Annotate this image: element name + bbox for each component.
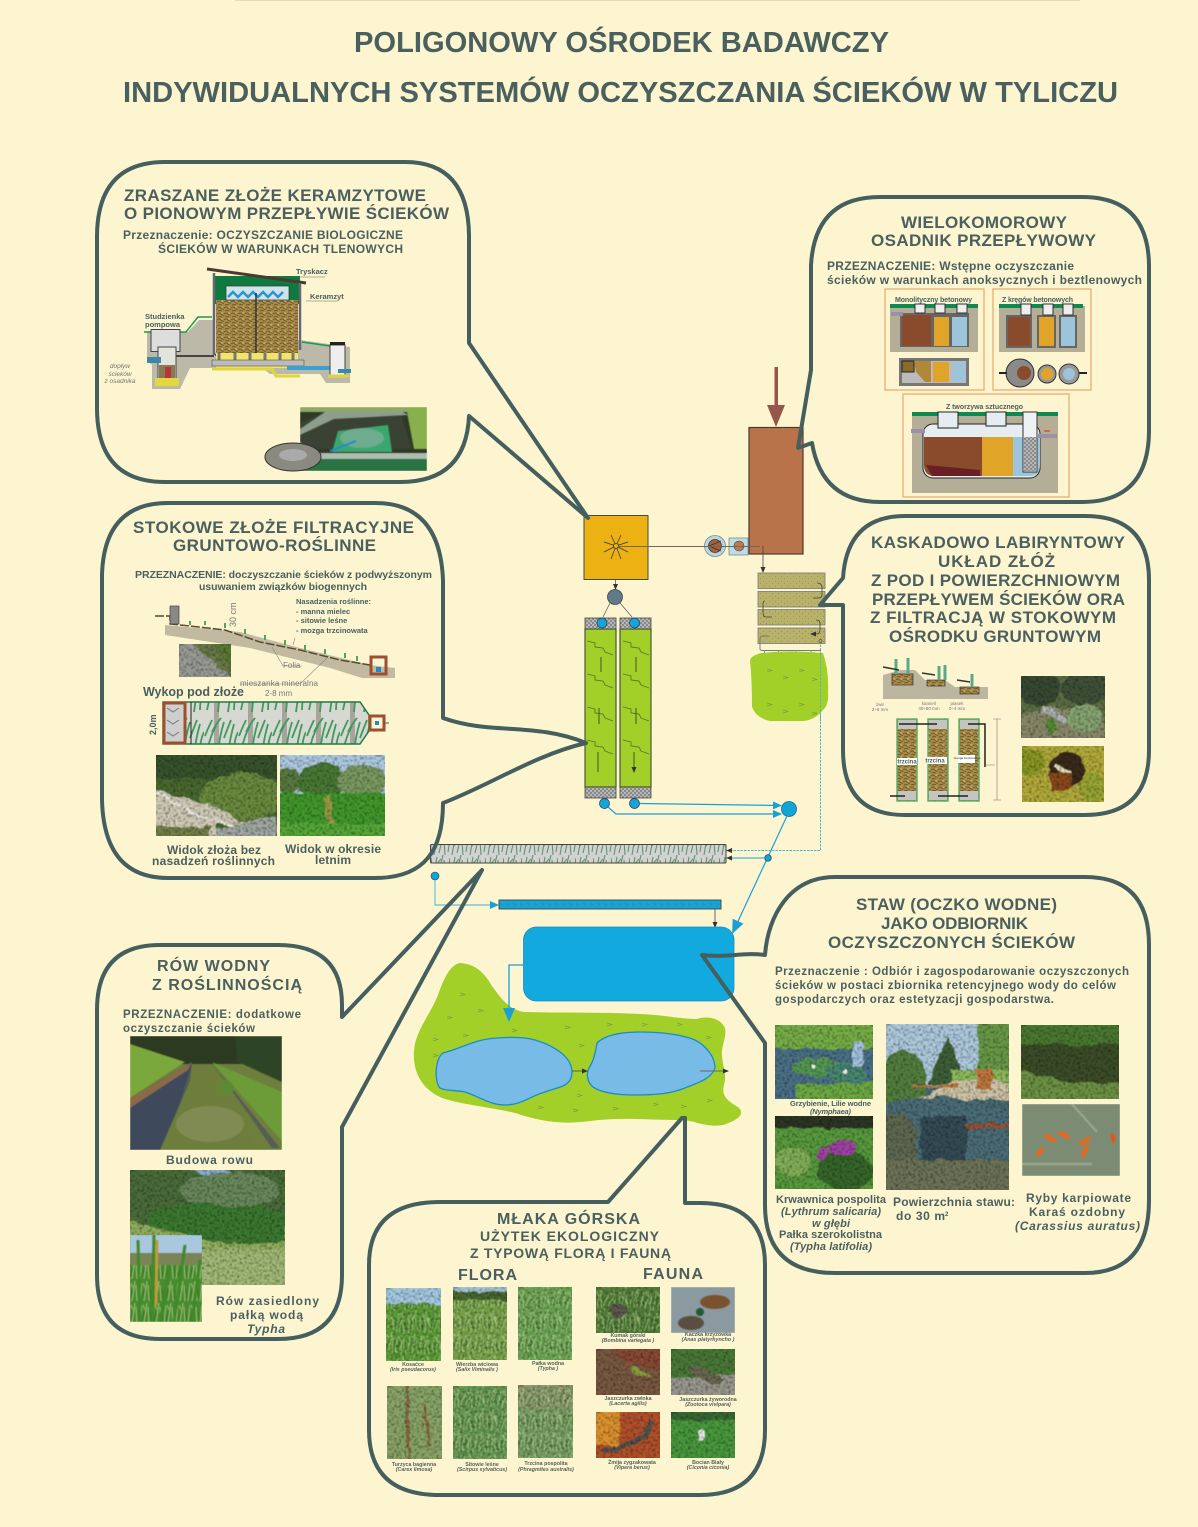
photo: filter tank [300, 407, 427, 471]
keramzyt bed cross-section: ścieków [108, 371, 133, 378]
photo: cascade stream [1021, 676, 1105, 738]
horizontal reed bed [430, 844, 726, 863]
caption: pond area [893, 1195, 1015, 1223]
distribution chamber [603, 579, 632, 617]
diagram: plastic tank: Z tworzywa sztucznego [946, 404, 1023, 411]
flora captions: (Salix Viminalis ) [456, 1367, 498, 1373]
photo: cascade chamber [1022, 746, 1104, 802]
left pond [436, 1037, 572, 1105]
callout outline [820, 516, 1149, 815]
caption: fish [1015, 1191, 1140, 1233]
meadow wetland with two ponds [414, 963, 741, 1126]
fauna captions [602, 1332, 737, 1471]
purpose text: PRZEZNACZENIE: doczyszczanie ścieków z podwyższonym [135, 569, 432, 581]
fauna captions: (Bombina variegata ) [602, 1338, 654, 1344]
caption: pond area: Powierzchnia stawu: [893, 1195, 1015, 1209]
photo captions: nasadzeń roślinnych [152, 854, 275, 868]
callout outline [97, 162, 588, 518]
photo: bed without plants [156, 755, 277, 836]
heading: STAW (OCZKO WODNE) [856, 895, 1057, 914]
diagram: plan of three beds: 2÷8 mm [872, 707, 888, 712]
yellow sprinkled bed square [584, 516, 648, 580]
heading: OCZYSZCZONYCH ŚCIEKÓW [828, 933, 1076, 952]
pump circle [704, 536, 726, 556]
ditch feed line [431, 872, 498, 905]
heading: OŚRODKU GRUNTOWYM [889, 627, 1101, 646]
photo: bed in summer [280, 755, 385, 836]
callout outline [798, 197, 1149, 502]
photo: cattail close-up [130, 1235, 202, 1322]
heading: Z TYPOWĄ FLORĄ I FAUNĄ [470, 1245, 671, 1261]
purpose text [135, 569, 432, 593]
caption: pond area: do 30 m [896, 1209, 945, 1223]
settling tank block [749, 428, 803, 554]
heading: OSADNIK PRZEPŁYWOWY [871, 231, 1097, 250]
keramzyt bed cross-section: dopływ [110, 363, 131, 370]
caption: ditch construction: Budowa rowu [166, 1153, 253, 1167]
heading [124, 186, 450, 223]
purpose text: usuwaniem związków biogennych [199, 581, 367, 593]
caption: fish: Karaś ozdobny [1029, 1205, 1125, 1219]
heading: Z FILTRACJĄ W STOKOWYM [870, 608, 1116, 627]
slope cross-section [155, 597, 395, 698]
photo captions: Widok złoża bez [167, 843, 261, 857]
slope cross-section: - manna mielec [296, 607, 350, 616]
keramzyt bed cross-section: Studzienka [145, 312, 185, 321]
diagram: concrete rings tank [993, 289, 1091, 390]
pump chamber square [729, 538, 748, 555]
flora captions: Trzcina pospolita [524, 1461, 568, 1467]
heading: UKŁAD ZŁÓŻ [938, 552, 1055, 571]
slope cross-section: Folia [283, 661, 301, 670]
title: INDYWIDUALNYCH SYSTEMÓW OCZYSZCZANIA ŚCIEKÓW W TYLICZU [123, 75, 1118, 109]
photo captions [152, 842, 381, 868]
diagram: plan of three beds: trzcina [897, 760, 917, 766]
callout outline [97, 870, 482, 1339]
diagram: plan of three beds: mozga trzcinowata [954, 756, 981, 760]
fauna captions: (Ciconia ciconia) [687, 1465, 729, 1471]
photo: loosestrife [775, 1116, 873, 1189]
keramzyt bed cross-section [103, 267, 351, 389]
caption: loosestrife and cattail: w głębi [812, 1218, 851, 1230]
diagram: concrete rings tank: Z kręgów betonowych [1002, 297, 1073, 304]
outflow collector with blue arrows [608, 641, 820, 932]
flora captions: Kosaćce [402, 1362, 424, 1368]
caption: fish: Ryby karpiowate [1026, 1191, 1131, 1205]
blue water ditch bar [499, 900, 721, 909]
purpose text: oczyszczanie ścieków [123, 1023, 255, 1035]
keramzyt bed cross-section: Tryskacz [296, 267, 328, 276]
callout outline [702, 877, 1149, 1273]
fauna captions: Bocian Biały [692, 1460, 724, 1466]
panel: cascade labyrinth bed system [820, 516, 1149, 815]
diagram: plan of three beds: kamień [922, 701, 937, 706]
title [123, 25, 1118, 109]
flora captions: Sitowie leśne [465, 1462, 499, 1468]
purpose text: PRZEZNACZENIE: dodatkowe [123, 1009, 301, 1021]
flora captions [390, 1361, 574, 1473]
diagram: plan of three beds: 0÷4 mm [949, 706, 965, 711]
heading: PRZEPŁYWEM ŚCIEKÓW ORA [872, 590, 1125, 609]
caption: lilies: Grzybienie, Lilie wodne [790, 1099, 871, 1108]
purpose text: ścieków w postaci zbiornika retencyjnego wody do celów [775, 980, 1116, 992]
caption: planted ditch: Typha [247, 1322, 285, 1336]
purpose text: ŚCIEKÓW W WARUNKACH TLENOWYCH [158, 241, 403, 256]
caption: lilies [790, 1099, 871, 1116]
diagram: plan of three beds: żwir [876, 702, 884, 707]
heading: STOKOWE ZŁOŻE FILTRACYJNE [133, 518, 414, 537]
heading: WIELOKOMOROWY [901, 213, 1068, 232]
pond outlet arrow to meadow [509, 965, 523, 1020]
keramzyt bed cross-section: Keramzyt [310, 292, 344, 301]
fauna captions: Jaszczurka żyworodna [679, 1397, 737, 1403]
panel: slope soil-plant filter bed [102, 503, 586, 878]
flora captions: (Iris pseudacorus) [390, 1367, 436, 1373]
caption: planted ditch: Rów zasiedlony [216, 1294, 319, 1308]
fauna captions: Żmija zygzakowata [608, 1459, 656, 1466]
connecting pipe [618, 546, 760, 548]
slope cross-section: Nasadzenia roślinne: [296, 597, 371, 606]
caption: planted ditch: pałką wodą [230, 1308, 303, 1322]
flora captions: Pałka wodna [532, 1361, 564, 1367]
subheading: flora: FLORA [458, 1267, 517, 1284]
cascade labyrinth beds [758, 573, 825, 657]
purpose text: PRZEZNACZENIE: Wstępne oczyszczanie [827, 259, 1074, 273]
heading [133, 518, 414, 555]
diagram: cascade section [883, 658, 988, 699]
diagram: plan of three beds: 40÷80 mm [918, 706, 940, 711]
heading: UŻYTEK EKOLOGICZNY [480, 1228, 660, 1244]
keramzyt bed cross-section: pompowa [145, 320, 181, 329]
flora captions: Wierzba wiciowa [456, 1362, 498, 1368]
keramzyt bed cross-section: z osadnika [103, 378, 136, 385]
diagram: monolithic concrete tank: Monolityczny betonowy [895, 297, 972, 304]
brown inflow arrow [767, 367, 785, 427]
heading [152, 956, 302, 994]
diagram: plan of three beds: piasek [950, 701, 964, 706]
subheading: fauna: FAUNA [643, 1266, 703, 1283]
slope cross-section: 2-8 mm [265, 689, 292, 698]
purpose text [775, 966, 1129, 1006]
photo: ditch construction [130, 1036, 282, 1150]
flora captions: Turzyca bagienna [392, 1462, 436, 1468]
photo: planted ditch [130, 1170, 285, 1285]
fauna captions: (Zootoca vivipara) [685, 1402, 731, 1408]
fauna captions: Kaczka krzyżówka [685, 1332, 731, 1338]
flora captions: (Phragmites australis) [518, 1467, 574, 1473]
purpose text: ścieków w warunkach anoksycznych i beztlenowych [827, 273, 1142, 287]
title: POLIGONOWY OŚRODEK BADAWCZY [354, 25, 889, 59]
photo captions: Widok w okresie [285, 842, 381, 856]
fauna captions: Jaszczurka zwinka [604, 1396, 652, 1402]
diagram: plan of three beds [872, 701, 1001, 801]
panel: pond as receiver [702, 877, 1149, 1273]
caption: loosestrife and cattail [776, 1194, 887, 1253]
caption: pond area: 2 [945, 1212, 949, 1218]
small wetland meadow [750, 652, 828, 721]
photo: pond surface [1021, 1025, 1119, 1099]
caption: loosestrife and cattail: Krwawnica pospolita [776, 1194, 887, 1206]
photo: goldfish [1022, 1104, 1120, 1176]
callout outline [369, 1118, 765, 1495]
slope cross-section: 30 cm [228, 602, 238, 627]
callout outline [102, 503, 586, 878]
purpose text [123, 228, 403, 256]
purpose text [123, 1009, 301, 1035]
heading: Z POD I POWIERZCHNIOWYM [871, 571, 1120, 590]
panel: water ditch with plants [97, 870, 482, 1339]
flora captions: (Typha ) [538, 1366, 558, 1372]
caption: planted ditch [216, 1294, 319, 1336]
photo: excavation [179, 644, 231, 677]
diagram: plastic tank [903, 394, 1069, 497]
plan view of bed: 2,0m [148, 714, 158, 735]
plan view of bed [148, 702, 389, 744]
fauna photo grid [590, 1281, 741, 1464]
fauna captions: (Anas platyrhyncho ) [682, 1337, 735, 1343]
fauna captions: (Vipera berus) [614, 1465, 650, 1471]
photo: water lilies [775, 1025, 873, 1099]
heading [470, 1209, 671, 1261]
panel: multi-chamber settling tank [798, 197, 1149, 502]
purpose text: Przeznaczenie : Odbiór i zagospodarowanie oczyszczonych [775, 966, 1129, 978]
label: excavation: Wykop pod złoże [143, 685, 244, 699]
caption: lilies: (Nymphaea) [810, 1107, 852, 1116]
flora captions: (Scirpus sylvaticus) [457, 1467, 507, 1473]
caption: loosestrife and cattail: Pałka szerokolistna [779, 1229, 883, 1241]
purpose text: Przeznaczenie: OCZYSZCZANIE BIOLOGICZNE [123, 228, 403, 242]
large blue pond block [524, 927, 734, 1001]
caption: loosestrife and cattail: (Typha latifolia) [790, 1241, 872, 1253]
slope cross-section: mieszanka mineralna [240, 679, 319, 688]
photo captions: letnim [315, 853, 351, 867]
slope cross-section: - sitowie leśne [296, 616, 347, 625]
heading: MŁAKA GÓRSKA [497, 1209, 640, 1228]
central process flow diagram [414, 367, 828, 1126]
heading: JAKO ODBIORNIK [881, 914, 1029, 933]
heading [870, 533, 1126, 646]
flora photo grid [380, 1281, 579, 1465]
purpose text: gospodarczych oraz estetyzacji gospodarstwa. [775, 994, 1054, 1006]
heading [871, 213, 1097, 250]
caption: loosestrife and cattail: (Lythrum salicaria) [781, 1206, 881, 1218]
panel: sprinkled keramzyt bed [97, 162, 588, 518]
heading: RÓW WODNY [157, 956, 270, 975]
slope cross-section: - mozga trzcinowata [296, 626, 369, 635]
flora captions: (Carex limosa) [396, 1467, 432, 1473]
heading: Z ROŚLINNOŚCIĄ [152, 975, 302, 994]
icon: manhole cover [265, 443, 321, 471]
vertical green filter bed columns [585, 618, 651, 808]
diagram: plan of three beds: trzcina [925, 758, 945, 764]
heading: GRUNTOWO-ROŚLINNE [173, 536, 376, 555]
panel: mountain mire [369, 1118, 765, 1495]
photo: pond [886, 1024, 1009, 1190]
fauna captions: Kumak górski [610, 1333, 646, 1339]
heading [828, 895, 1076, 952]
heading: O PIONOWYM PRZEPŁYWIE ŚCIEKÓW [124, 204, 450, 223]
diagram: monolithic concrete tank [885, 289, 984, 390]
heading: ZRASZANE ZŁOŻE KERAMZYTOWE [124, 186, 426, 205]
purpose text [827, 259, 1142, 287]
right pond [587, 1032, 715, 1095]
caption: fish: (Carassius auratus) [1015, 1219, 1140, 1233]
fauna captions: (Lacerta agilis) [609, 1401, 647, 1407]
heading: KASKADOWO LABIRYNTOWY [871, 533, 1126, 552]
